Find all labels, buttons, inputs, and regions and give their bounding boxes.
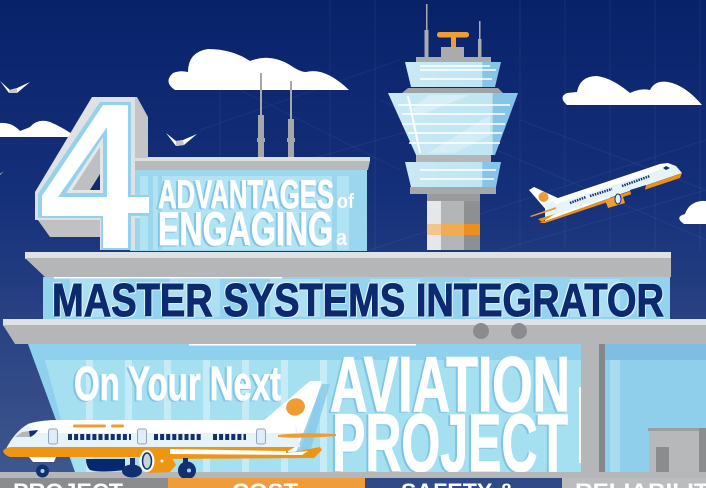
control tower — [388, 4, 518, 250]
observation glass — [388, 93, 518, 155]
heading: on your next: On Your Next — [74, 358, 281, 411]
stabiliser and roof stripes — [73, 424, 336, 438]
first roof — [25, 252, 671, 277]
building column — [581, 344, 605, 472]
tail fin — [262, 381, 322, 452]
lower glass facade — [28, 344, 581, 472]
extrusion — [128, 97, 148, 158]
undercarriage — [29, 457, 196, 480]
bird: left — [0, 81, 30, 93]
second roof — [3, 319, 706, 344]
engine — [140, 450, 176, 473]
distant terminal — [648, 428, 706, 472]
antennas on roof — [257, 73, 295, 157]
heading: advantages of: ADVANTAGES — [158, 173, 334, 217]
tower band — [402, 88, 503, 93]
tower roof — [416, 57, 491, 63]
cockpit — [15, 430, 38, 437]
heading: engaging a: ENGAGING — [158, 202, 333, 255]
heading: aviation: AVIATION — [330, 340, 570, 428]
cloud: right — [562, 76, 702, 105]
tower shaft — [427, 194, 480, 250]
bird: centre — [166, 133, 197, 146]
bird: left edge — [0, 171, 4, 175]
tab: safety — [365, 478, 562, 488]
upper building glass — [130, 170, 367, 251]
windows — [68, 434, 246, 440]
parked plane — [3, 381, 336, 480]
master systems band — [43, 277, 670, 319]
cloud: far right — [679, 201, 706, 224]
fuselage — [5, 420, 300, 451]
tower band lower — [416, 155, 491, 162]
tab: project — [0, 478, 168, 488]
numeral 4 — [35, 97, 149, 250]
right glass facade — [605, 344, 706, 472]
ground strip — [0, 472, 706, 478]
roof lights — [473, 323, 527, 339]
tower base ledge — [410, 187, 496, 194]
tab: cost — [168, 478, 365, 488]
flying plane — [529, 163, 682, 223]
upper glass — [405, 62, 501, 87]
cloud: top centre — [168, 49, 349, 90]
heading: engaging a: a — [336, 225, 348, 250]
belly stripe — [3, 447, 322, 459]
heading: advantages of: of — [337, 191, 354, 213]
radar — [437, 32, 469, 57]
tower antennas — [424, 4, 482, 57]
cloud: left — [0, 121, 72, 137]
lower glass — [405, 162, 501, 187]
upper roof — [132, 157, 370, 170]
